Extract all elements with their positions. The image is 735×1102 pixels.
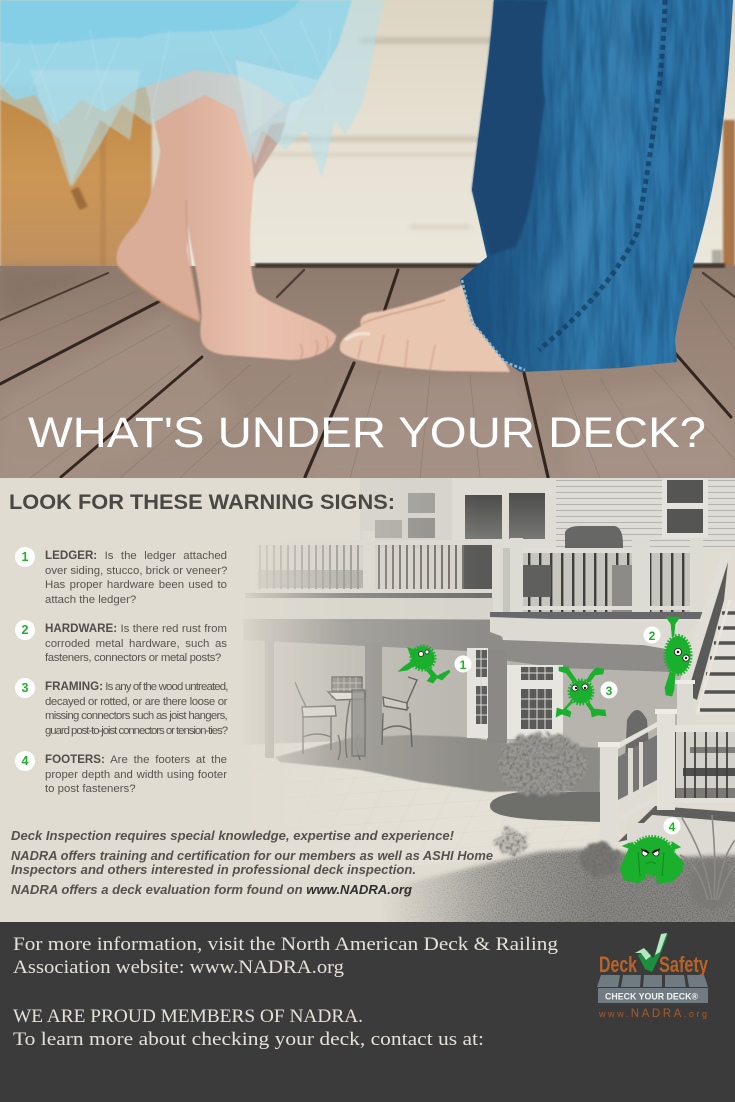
child legs and feet [117, 50, 336, 360]
item: footers: proper depth and width using footer [45, 769, 227, 781]
number badge 3 [600, 682, 618, 698]
wood strip at right [712, 120, 735, 270]
tulle skirt [0, 0, 385, 187]
columns [265, 640, 507, 771]
inspection notes: Deck Inspection requires special knowledge, expertise and experience! [11, 829, 454, 843]
inspection notes [11, 829, 493, 897]
badge: item 3: 3 [22, 681, 28, 695]
item: ledger [45, 549, 227, 606]
number badge 1 [454, 656, 472, 672]
footer text: To learn more about checking your deck, contact us at: [13, 1030, 484, 1050]
number badge 2 [644, 626, 660, 644]
monster 3 [556, 667, 606, 717]
badge: item 1 [15, 547, 35, 567]
deck illustration with monsters [9, 478, 735, 922]
footer text [13, 935, 558, 1050]
panel: footer [13, 933, 709, 1050]
table [328, 692, 365, 760]
monster 2 [665, 617, 690, 696]
grill [565, 526, 623, 550]
monster 4 [620, 837, 683, 883]
number badge 1: 1 [460, 658, 467, 672]
inspection notes: NADRA offers a deck evaluation form found on www.NADRA.org [11, 883, 412, 897]
wall [0, 0, 735, 270]
number badge 4: 4 [669, 820, 676, 834]
footer text: WE ARE PROUD MEMBERS OF NADRA. [13, 1007, 363, 1027]
monster 1 [399, 646, 450, 683]
item: hardware [45, 622, 227, 664]
badge: item 3 [15, 678, 35, 698]
left fade overlay [235, 478, 480, 922]
patio chairs and table [295, 677, 417, 760]
floor boards [0, 266, 735, 478]
badge: item 2: 2 [22, 623, 28, 637]
left chair [295, 682, 336, 754]
item: framing: missing connectors such as joist hangers, [45, 710, 227, 722]
lower stair railing [598, 709, 735, 862]
hero photo: child and parent feet on a wooden deck [0, 0, 735, 478]
item: hardware: HARDWARE: Is there red rust from [45, 622, 227, 635]
logo check mark [635, 933, 668, 972]
item: ledger: attach the ledger? [45, 594, 136, 606]
heading: LOOK FOR THESE WARNING SIGNS: [9, 490, 395, 514]
number badge 3: 3 [606, 684, 613, 698]
logo deck tiles [597, 975, 708, 987]
item: hardware: fasteners, connectors or metal posts? [45, 652, 221, 664]
stairs [675, 552, 735, 732]
item: footers: to post fasteners? [45, 783, 136, 795]
badge: item 2 [15, 620, 35, 640]
tree behind railing [625, 710, 650, 760]
logo banner: CHECK YOUR DECK® [605, 992, 698, 1002]
item: footers [45, 753, 227, 795]
panel: warning signs [0, 478, 735, 922]
door and window under deck [467, 648, 563, 739]
gravel ground [380, 848, 735, 930]
upper deck right railing [490, 538, 705, 645]
badge: item 1: 1 [22, 550, 28, 564]
item: framing: decayed or rotted, or are there loose or [45, 696, 227, 708]
item: framing: guard post-to-joist connectors or tension-ties? [45, 725, 227, 737]
front chair [352, 690, 365, 756]
item: framing [45, 680, 228, 737]
wood grain [0, 290, 735, 478]
number badge 4 [664, 818, 680, 834]
under-deck wall [243, 618, 503, 753]
item: ledger: over siding, stucco, brick or veneer? [45, 565, 227, 577]
upper deck left railing [243, 531, 493, 619]
logo wordmark: Deck [599, 952, 638, 977]
item: framing: FRAMING: Is any of the wood untreated, [45, 680, 228, 693]
low shrubs and grass [496, 815, 735, 909]
footer text: Association website: www.NADRA.org [13, 958, 344, 978]
badge: item 4 [15, 751, 35, 771]
item: ledger: LEDGER: Is the ledger attached [45, 549, 227, 562]
under-deck floor shadow [275, 735, 600, 795]
patio pavers [240, 735, 640, 860]
right chair [382, 677, 417, 747]
house wall and windows [360, 478, 735, 548]
plank gaps [0, 270, 735, 477]
logo url: www.NADRA .org [598, 1008, 707, 1020]
parent foot [340, 285, 510, 372]
number badge 2: 2 [649, 629, 656, 643]
inspection notes: NADRA offers training and certification for our members as well as ASHI Home [11, 849, 493, 863]
logo wordmark [599, 952, 709, 977]
item: hardware: corroded metal hardware, such as [45, 638, 227, 650]
item: footers: FOOTERS: Are the footers at the [45, 753, 227, 766]
under-deck ceiling [243, 618, 672, 672]
badge: item 4: 4 [22, 754, 28, 768]
inspection notes: Inspectors and others interested in professional deck inspection. [11, 863, 416, 877]
logo: Deck Safety [597, 933, 709, 1020]
title: WHAT'S UNDER YOUR DECK? [28, 409, 706, 457]
item: ledger: Has proper hardware been used to [45, 579, 227, 591]
jeans [460, 0, 733, 372]
mulch bed and shrub [490, 792, 600, 822]
wooden post at left [0, 85, 160, 270]
back chair [332, 677, 362, 697]
footer text: For more information, visit the North American Deck & Railing [13, 935, 558, 955]
logo wordmark: Safety [659, 952, 709, 977]
